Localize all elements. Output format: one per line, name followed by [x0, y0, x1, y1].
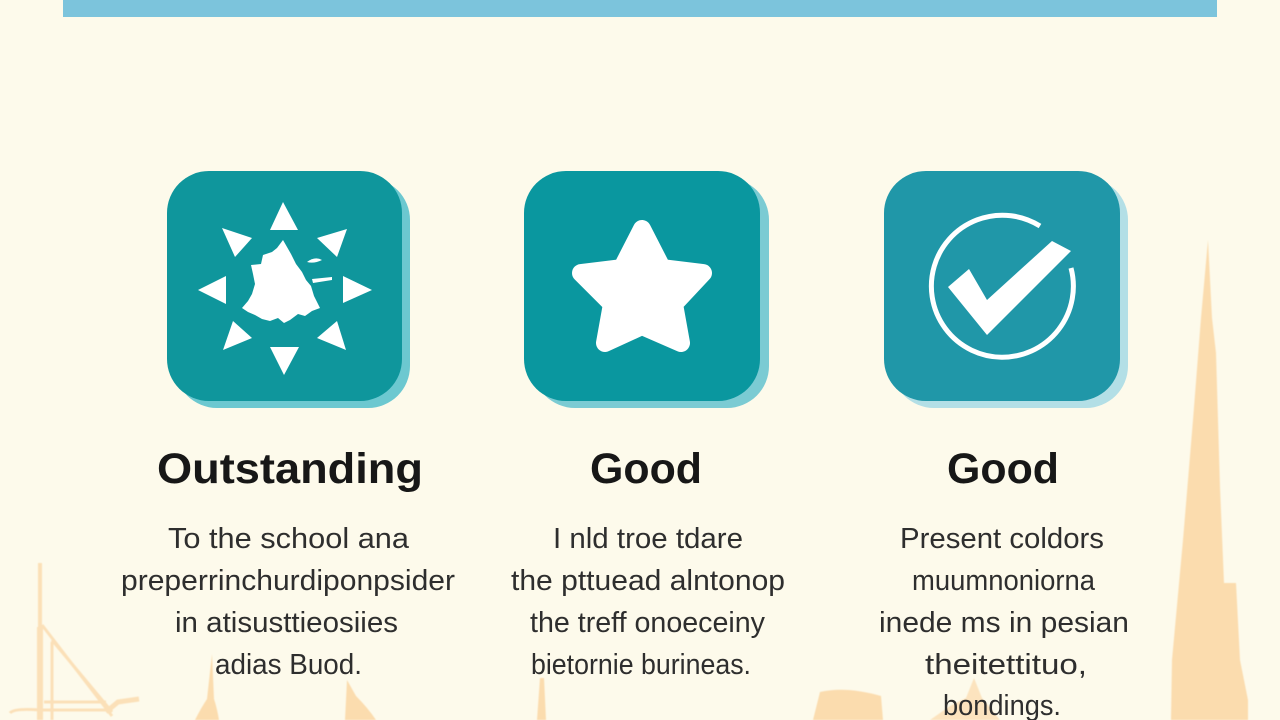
- description: Outstanding: adias Buod.: [215, 649, 362, 681]
- icon: sunburst: [198, 202, 372, 375]
- icon tile: check: [884, 171, 1128, 408]
- description: Outstanding: To the school ana: [168, 523, 410, 555]
- description: Good check: theitettituo,: [925, 649, 1087, 681]
- landmark: tall tower: [1171, 240, 1248, 720]
- top banner bar: [63, 0, 1217, 17]
- heading: Good: Good: [947, 445, 1059, 493]
- skyline silhouette: [10, 240, 1248, 720]
- description: Outstanding: [121, 523, 455, 681]
- icon tile: star: [524, 171, 769, 408]
- description: Good check: Present coldors: [900, 523, 1104, 555]
- landmark: thin spire: [537, 678, 546, 720]
- landmark: central dome: [930, 678, 1000, 720]
- heading: Outstanding: Outstanding: [157, 445, 423, 493]
- card: Good (star): [511, 171, 785, 681]
- icon: star: [581, 229, 703, 343]
- description: Good star: the treff onoeceiny: [530, 607, 765, 639]
- description: Outstanding: in atisusttieosiies: [175, 607, 398, 639]
- landmark: sail tower outline: [10, 563, 139, 720]
- heading: Good: Good: [590, 445, 702, 493]
- description: Good star: [511, 523, 785, 681]
- landmark: block building: [813, 690, 883, 720]
- card: Good (check): [879, 171, 1129, 720]
- description: Good check: inede ms in pesian: [879, 607, 1129, 639]
- icon tile: outstanding: [167, 171, 410, 408]
- card: Outstanding: [121, 171, 455, 681]
- landmark: peaked dome: [345, 680, 376, 720]
- description: Good star: bietornie burineas.: [531, 649, 751, 681]
- description: Outstanding: preperrinchurdiponpsider: [121, 565, 455, 597]
- icon: check circle: [931, 215, 1073, 357]
- landmark: small spire dome: [195, 654, 219, 720]
- description: Good star: the pttuead alntonop: [511, 565, 785, 597]
- description: Good check: muumnoniorna: [912, 565, 1096, 597]
- description: Good check: [879, 523, 1129, 720]
- description: Good star: I nld troe tdare: [553, 523, 743, 555]
